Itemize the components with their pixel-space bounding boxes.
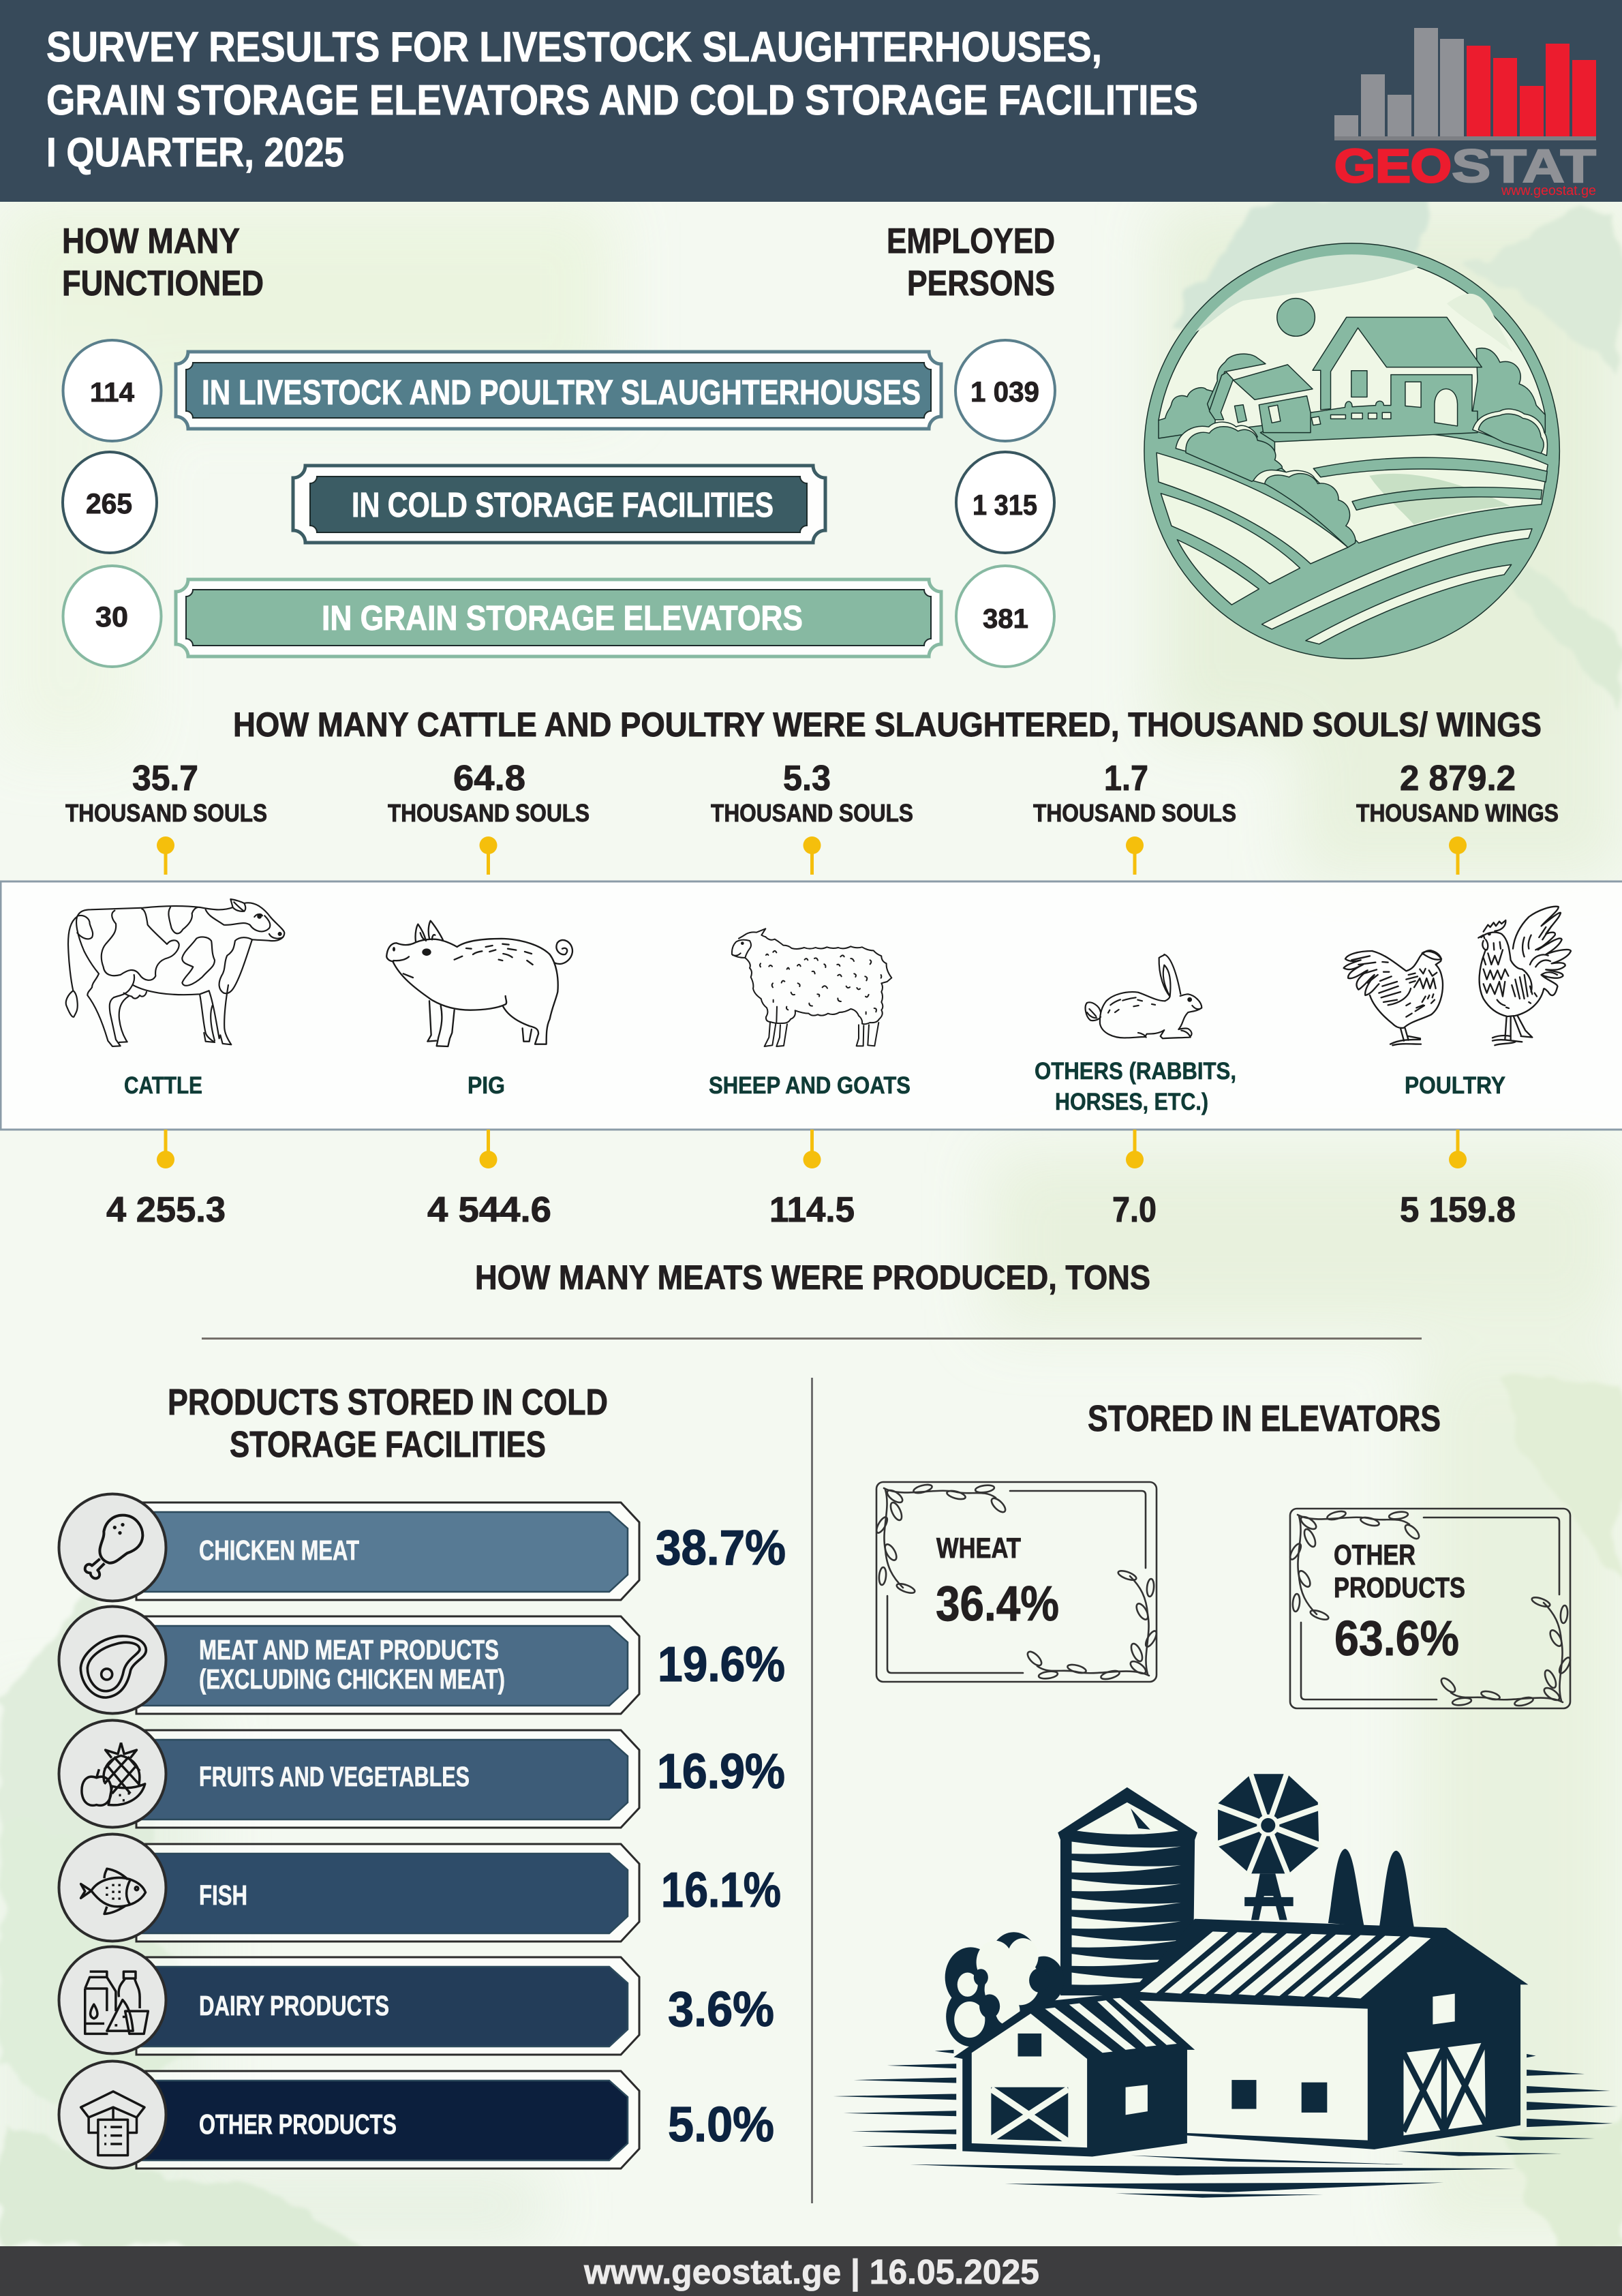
emblem: farm landscape (1144, 243, 1559, 659)
bar: meat and meat products: MEAT AND MEAT PRODUCTS (199, 1634, 499, 1665)
heading: products in cold storage: STORAGE FACILITIES (230, 1424, 546, 1465)
illustration: farm with silo and windmill (833, 1772, 1618, 2198)
icon: cow (66, 899, 284, 1046)
icon: fish (81, 1869, 146, 1914)
bushy tree (945, 1932, 1064, 2046)
slaughter figures row: 64.8 (453, 759, 525, 798)
slaughter figures row: 2 879.2 (1400, 759, 1516, 798)
title: GRAIN STORAGE ELEVATORS AND COLD STORAGE FACILITIES (46, 77, 1198, 124)
bar: fish: 16.1% (661, 1863, 781, 1918)
meat production values (106, 1190, 1516, 1230)
footer bar: www.geostat.ge | 16.05.2025 (583, 2252, 1039, 2292)
animal labels (124, 1058, 1505, 1115)
column heading: how many functioned: HOW MANY (62, 222, 240, 261)
column heading: how many functioned: FUNCTIONED (62, 264, 264, 303)
bar: chicken meat: CHICKEN MEAT (199, 1535, 359, 1566)
bar: chicken meat: 38.7% (656, 1521, 786, 1575)
heading: meat produced: HOW MANY MEATS WERE PRODUCED, TONS (475, 1258, 1150, 1297)
icon: dairy (85, 1972, 148, 2034)
bar: chicken meat (59, 1494, 786, 1601)
meat production values: 7.0 (1112, 1190, 1157, 1230)
animal labels: SHEEP AND GOATS (709, 1072, 911, 1099)
slaughter figures row: 1.7 (1104, 759, 1148, 798)
icon: sheep (732, 928, 891, 1046)
row: cold storage (63, 452, 1054, 553)
pins above band (157, 836, 1467, 875)
card: other products (1288, 1509, 1572, 1708)
logo: Geostat (1334, 28, 1596, 198)
bar: fruits and vegetables (59, 1721, 785, 1828)
bar: fish (59, 1834, 781, 1942)
row: slaughterhouses: IN LIVESTOCK AND POULTRY SLAUGHTERHOUSES (202, 373, 921, 412)
animal labels: HORSES, ETC.) (1055, 1089, 1208, 1115)
trees (1328, 1849, 1414, 1929)
slaughter figures row: THOUSAND WINGS (1356, 799, 1559, 827)
slaughter figures row: THOUSAND SOULS (1033, 799, 1236, 827)
ground lines (833, 2050, 1618, 2198)
icon: fruit (82, 1742, 145, 1805)
column heading: how many functioned (62, 222, 264, 303)
bar: fruits and vegetables: FRUITS AND VEGETABLES (199, 1761, 470, 1792)
row: slaughterhouses (63, 340, 1055, 441)
card: wheat: WHEAT (936, 1532, 1021, 1564)
row: slaughterhouses: 1 039 (970, 376, 1039, 408)
meat production values: 114.5 (769, 1190, 855, 1230)
pins below band (157, 1130, 1467, 1168)
animal labels: CATTLE (124, 1072, 202, 1099)
bar: meat and meat products (59, 1606, 785, 1714)
column heading: employed persons: EMPLOYED (887, 222, 1055, 261)
heading: products in cold storage (168, 1382, 608, 1465)
slaughter figures row: THOUSAND SOULS (711, 799, 913, 827)
heading: products in cold storage: PRODUCTS STORED IN COLD (168, 1382, 608, 1423)
animal labels: OTHERS (RABBITS, (1035, 1058, 1236, 1085)
meat production values: 5 159.8 (1400, 1190, 1516, 1230)
slaughter figures row: 35.7 (132, 759, 198, 798)
title: SURVEY RESULTS FOR LIVESTOCK SLAUGHTERHOUSES, (46, 24, 1102, 71)
animal band (1, 881, 1622, 1130)
bar: dairy products (59, 1947, 774, 2055)
row: cold storage: 1 315 (973, 489, 1037, 521)
card: other products: 63.6% (1334, 1612, 1459, 1666)
row: grain elevators: 381 (983, 604, 1028, 634)
header bar (0, 0, 1622, 202)
icon: pig (386, 921, 572, 1046)
row: grain elevators (63, 566, 1054, 667)
card: other products: PRODUCTS (1334, 1571, 1465, 1603)
bar: other products: 5.0% (668, 2098, 774, 2152)
meat production values: 4 544.6 (427, 1190, 551, 1230)
card: wheat (874, 1482, 1159, 1682)
row: grain elevators: 30 (95, 601, 128, 633)
bar: meat and meat products: 19.6% (658, 1637, 785, 1692)
icon: rabbit (1086, 954, 1202, 1038)
title: I QUARTER, 2025 (46, 130, 344, 175)
slaughter figures row: 5.3 (783, 759, 831, 798)
icon: steak (80, 1636, 146, 1697)
bar: dairy products: DAIRY PRODUCTS (199, 1990, 389, 2021)
bar: fruits and vegetables: 16.9% (657, 1744, 785, 1799)
icon: chicken leg (85, 1515, 142, 1578)
logo: Geostat: www.geostat.ge (1501, 183, 1596, 198)
icon: box and checklist (81, 2091, 144, 2156)
heading: stored in elevators: STORED IN ELEVATORS (1088, 1398, 1441, 1439)
icon: hen and rooster (1344, 907, 1571, 1045)
bar: dairy products: 3.6% (668, 1982, 774, 2037)
bar: other products: OTHER PRODUCTS (199, 2109, 397, 2140)
animal labels: POULTRY (1405, 1072, 1505, 1099)
small barn (953, 1993, 1195, 2157)
logo: Geostat: STAT (1452, 140, 1596, 192)
logo: Geostat: GEO (1334, 140, 1452, 192)
slaughter figures row (65, 759, 1559, 827)
title (46, 24, 1198, 175)
bar: fish: FISH (199, 1879, 247, 1911)
windmill (1215, 1772, 1321, 1920)
column heading: employed persons (887, 222, 1055, 303)
bar: meat and meat products: (EXCLUDING CHICKEN MEAT) (199, 1663, 505, 1695)
card: wheat: 36.4% (936, 1577, 1059, 1631)
silo (1058, 1787, 1197, 1995)
column heading: employed persons: PERSONS (907, 264, 1055, 303)
animal labels: PIG (468, 1072, 505, 1099)
row: slaughterhouses: 114 (90, 378, 135, 408)
main barn (1126, 1919, 1528, 2149)
footer bar (0, 2246, 1622, 2296)
row: grain elevators: IN GRAIN STORAGE ELEVATORS (322, 599, 803, 637)
slaughter figures row: THOUSAND SOULS (388, 799, 590, 827)
bar: other products (59, 2061, 774, 2169)
row: cold storage: IN COLD STORAGE FACILITIES (352, 485, 774, 524)
meat production values: 4 255.3 (106, 1190, 226, 1230)
row: cold storage: 265 (86, 487, 132, 519)
slaughter figures row: THOUSAND SOULS (65, 799, 267, 827)
card: other products: OTHER (1334, 1539, 1416, 1571)
